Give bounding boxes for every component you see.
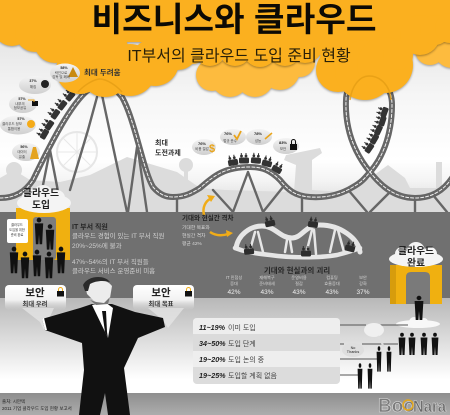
text: expectation gap: 평균 42% [182,240,202,247]
bubble: fear 58%: 감독 및 폐쇄 [52,74,70,79]
bubble: fear 57% internal sharing [9,95,38,113]
no thanks bubble: No [351,346,355,350]
gate: cloud adoption [16,185,71,260]
gap figures: 37% [356,289,370,296]
figure on cloud [396,296,440,328]
bubble: cost 76% [192,139,216,155]
note: cloud adoption readiness: 클라우드 [11,222,23,227]
source: 2011 기업 클라우드 도입 현황 보고서 [2,405,72,412]
security card: biggest worry: 최대 우려 [23,299,48,308]
heading: gap between expectation and reality: 기대와 현실과의 괴리 [264,265,330,275]
source [2,398,72,412]
table row labels: 도입할 계획 없음 [228,371,278,380]
gate: cloud completed [389,242,443,304]
bubble: security 83% [273,138,299,154]
text: IT department staff [72,222,164,275]
no thanks bubble: Thanks [347,350,359,354]
floor [0,298,450,394]
table rows: 19~20% [199,355,226,364]
gap figures: 42% [227,289,241,296]
logo [378,396,446,415]
bubble: fear 37% hacking: 37% [29,79,37,83]
gate: cloud completed: 완료 [407,256,425,269]
security card: biggest worry: 보안 [25,287,45,299]
bubble: fear 58%: 락인으로 [55,70,67,75]
bubble: fear 57% cloud info [0,116,36,134]
note: cloud adoption readiness [7,219,28,243]
subtitle: IT부서의 클라우드 도입 준비 현황 [127,47,351,65]
coaster cars: loop [360,105,389,154]
gate: cloud adoption: 클라우드 [23,187,59,199]
table row labels: 도입 논의 중 [228,355,265,364]
gap figures: 컴퓨팅 [326,274,338,281]
bubble: compliance 76%: 법규 준수 [223,138,237,143]
bubble: performance 78%: 성능 [255,138,261,143]
gap figures: 증대 [230,280,238,287]
bubble: security 83%: 보안 [280,146,286,151]
bubble: fear 57% cloud info: 57% [17,117,25,121]
arrows: gap [203,195,233,237]
gap figures: 준비태세 [259,280,275,287]
security card: biggest goal: 보안 [151,287,171,299]
table row labels: 도입 단계 [228,339,256,348]
gate: cloud completed: 클라우드 [398,245,434,257]
text: IT department staff: IT 부서 직원 [72,222,108,231]
gap figures: IT 민첩성 [226,274,242,280]
coaster cars: middle hill [227,153,285,175]
adoption table [193,318,340,384]
no thanks bubble [342,343,364,357]
note: cloud adoption readiness: 도입을 위한 [9,227,25,232]
background silhouettes: park scenery [0,132,450,212]
gap figures: 43% [260,289,274,296]
gap figures: 효율증대 [324,280,340,287]
text: expectation gap: 현실간 격차 [182,232,206,239]
bottom strip [0,393,450,415]
text: IT department staff: 클라우드 경험이 있는 IT 부서 직원 [72,231,164,240]
gap figures [226,274,370,296]
table rows: 34~50% [199,339,226,348]
title: 비즈니스와 클라우드 [92,2,376,39]
secondary light cloud [196,32,450,97]
bubble: fear 56% data leak [12,143,40,161]
businessman [42,277,165,415]
bubble: performance 78% [246,129,272,145]
connector lines [340,325,408,375]
table row labels: 이미 도입 [228,323,256,332]
bubble: fear 57% cloud info: 통합이용 [8,126,20,131]
bubble: fear 56% data leak: 데이터 [17,149,27,154]
text: expectation gap [182,213,233,247]
bubble: security 83%: 83% [279,140,287,145]
bubble: fear 37% hacking: 해킹 [30,84,36,89]
text: IT department staff: 클라우드 서비스 운영준비 미흡 [72,266,155,275]
gap figures: 절감 [295,280,303,286]
bubble: compliance 76% [220,129,246,145]
gap figures: 강화 [359,280,367,287]
bubble: fear 58%: 58% [60,66,68,70]
bubble: cost 76%: 76% [198,141,206,146]
bubble: fear 57% internal sharing: 정보공유 [14,105,26,110]
bubble: fear 56% data leak: 유출 [19,154,25,159]
gap figures: 43% [325,289,339,296]
thought cloud [364,323,384,347]
label: biggest challenge: 도전과제 [155,148,181,157]
security card: biggest worry [5,285,66,330]
bubble: fear 37% hacking [19,76,51,94]
rollercoaster: main track [0,78,450,212]
note: cloud adoption readiness: 준비 완료 [11,232,23,237]
bubble: fear 56% data leak: 56% [20,145,28,149]
bubble: fear 57% internal sharing: 내부의 [15,101,25,106]
mini coaster diagram [235,215,360,257]
bubble: fear 57% cloud info: 클라우드 정보 [2,121,22,126]
text: expectation gap: 기대와 현실간 격차 [182,213,233,222]
gap figures: 재해복구 [259,274,275,281]
bubble: compliance 76%: 76% [224,131,232,136]
label: biggest fear: 최대 두려움 [84,67,121,77]
table rows: 11~19% [199,323,226,332]
security card: biggest goal [133,285,194,328]
figures: adoption stages [358,333,438,389]
orange title cloud [0,0,450,100]
text: IT department staff: 20%~25%에 불과 [72,241,122,250]
label: biggest challenge: 최대 [155,138,168,147]
text: expectation gap: 기대한 목표와 [182,224,210,231]
text: IT department staff: 47%~54%의 IT 부서 직원들 [72,257,149,266]
label: biggest challenge [155,138,181,157]
table rows [199,323,226,380]
gap figures: 보안 [359,274,367,280]
table row labels [228,323,278,380]
bubble: cost 76%: 비용 절감 [195,146,209,151]
bubble: fear 57% internal sharing: 57% [18,97,26,101]
gap figures: 43% [292,289,306,296]
dark grey band [0,212,450,299]
faint loop top through cloud [78,76,391,100]
gate: cloud adoption: 도입 [32,198,50,211]
security card: biggest goal: 최대 목표 [149,299,174,308]
coaster cars: first hill [35,88,76,140]
bubble: cost 76%: $ [209,143,215,155]
sky background [0,0,450,213]
gap figures: 운영비용 [291,274,307,281]
bubble: performance 78%: 78% [254,131,262,136]
figures: IT staff [10,218,65,278]
table rows: 19~25% [199,371,226,380]
source: 출처: 시만텍 [2,398,25,405]
bubble: fear 58% [50,64,80,82]
